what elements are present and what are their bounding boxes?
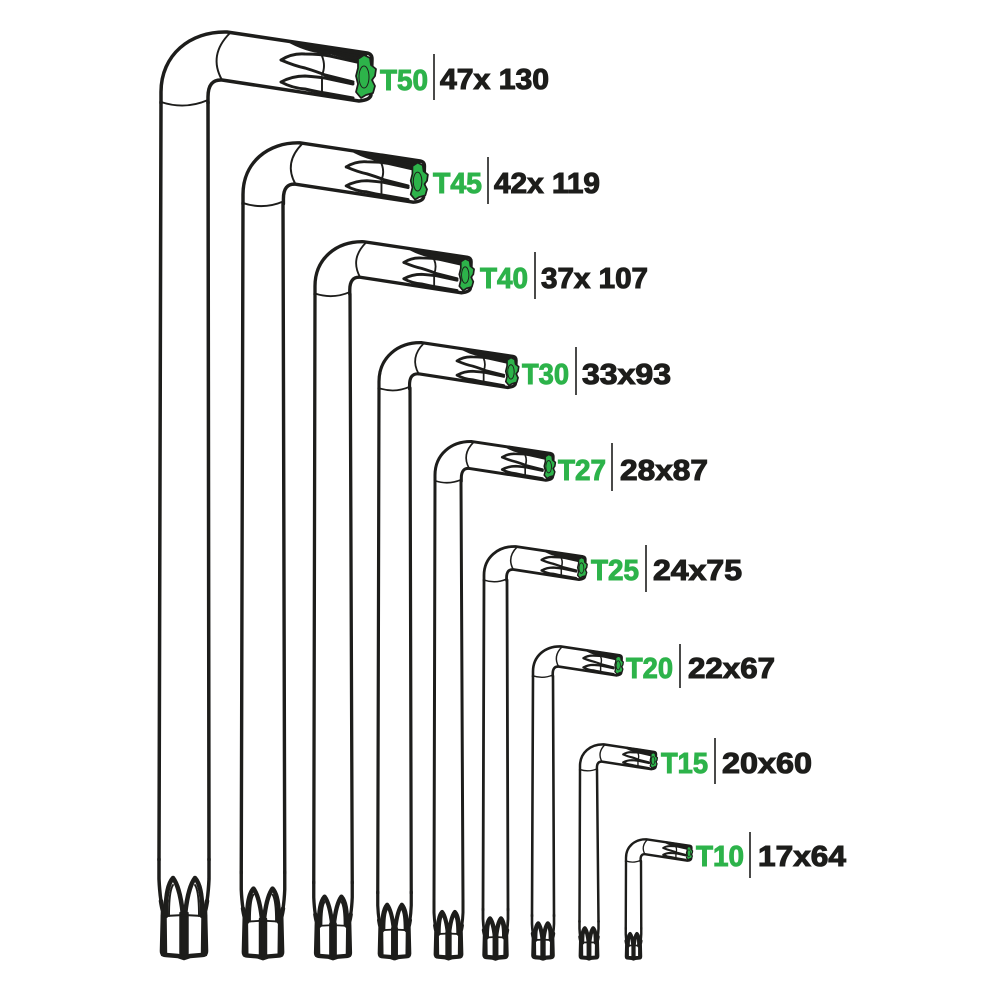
tip T45 xyxy=(241,872,285,958)
label T10: T10 xyxy=(696,841,744,873)
wrench head T40 xyxy=(315,242,474,296)
label T45 xyxy=(433,157,600,204)
shaft T40 xyxy=(314,294,352,883)
label T45: T45 xyxy=(433,168,482,200)
label T15: T15 xyxy=(661,748,708,780)
shaft T27 xyxy=(434,481,463,902)
wrench head T45 xyxy=(243,143,428,206)
label T30: 33x93 xyxy=(582,359,671,391)
tip T50 xyxy=(159,859,209,958)
label T20: T20 xyxy=(626,653,673,685)
shaft T30 xyxy=(378,388,411,893)
wrench T45 xyxy=(241,143,428,958)
wrench T27 xyxy=(434,442,555,958)
wrench head T15 xyxy=(580,744,657,771)
shaft T20 xyxy=(532,676,554,916)
label T50: 47x 130 xyxy=(440,64,549,96)
label T15 xyxy=(661,738,812,784)
wrench head T50 xyxy=(161,32,376,106)
label T27: 28x87 xyxy=(620,455,708,487)
wrench T10 xyxy=(626,839,693,959)
label T10 xyxy=(696,832,846,878)
wrench T25 xyxy=(483,546,587,958)
shaft T50 xyxy=(159,102,209,860)
wrench T20 xyxy=(532,646,623,959)
label T50: T50 xyxy=(380,65,428,97)
wrench T15 xyxy=(580,744,657,959)
label T10: 17x64 xyxy=(758,841,846,873)
wrench head T30 xyxy=(379,343,519,390)
label T15: 20x60 xyxy=(722,748,812,780)
label T20 xyxy=(626,644,775,688)
tip T40 xyxy=(314,882,352,958)
label T30: T30 xyxy=(522,359,569,391)
tip T25 xyxy=(483,909,508,958)
shaft T45 xyxy=(241,203,285,873)
shaft T15 xyxy=(580,770,598,922)
label T50 xyxy=(380,54,549,100)
label T25 xyxy=(591,545,742,592)
wrench head T25 xyxy=(484,546,587,582)
shaft T10 xyxy=(626,861,641,929)
wrench T30 xyxy=(378,343,519,958)
wrench T40 xyxy=(314,242,474,958)
tip T30 xyxy=(378,892,411,958)
label T30 xyxy=(522,347,671,395)
tip T10 xyxy=(626,928,641,959)
wrench T50 xyxy=(159,32,376,958)
label T40: 37x 107 xyxy=(541,263,648,295)
label T25: T25 xyxy=(591,555,639,587)
label T40 xyxy=(480,252,648,299)
label T45: 42x 119 xyxy=(494,168,600,200)
wrench head T10 xyxy=(626,839,693,862)
label T27: T27 xyxy=(558,455,606,487)
tip T20 xyxy=(532,915,554,959)
label T20: 22x67 xyxy=(688,653,775,685)
label T27 xyxy=(558,443,708,491)
wrench head T20 xyxy=(533,646,623,677)
tip T15 xyxy=(580,921,598,959)
tip T27 xyxy=(434,901,463,958)
shaft T25 xyxy=(483,580,508,910)
label T40: T40 xyxy=(480,263,528,295)
label T25: 24x75 xyxy=(653,555,742,587)
wrench head T27 xyxy=(435,442,555,483)
